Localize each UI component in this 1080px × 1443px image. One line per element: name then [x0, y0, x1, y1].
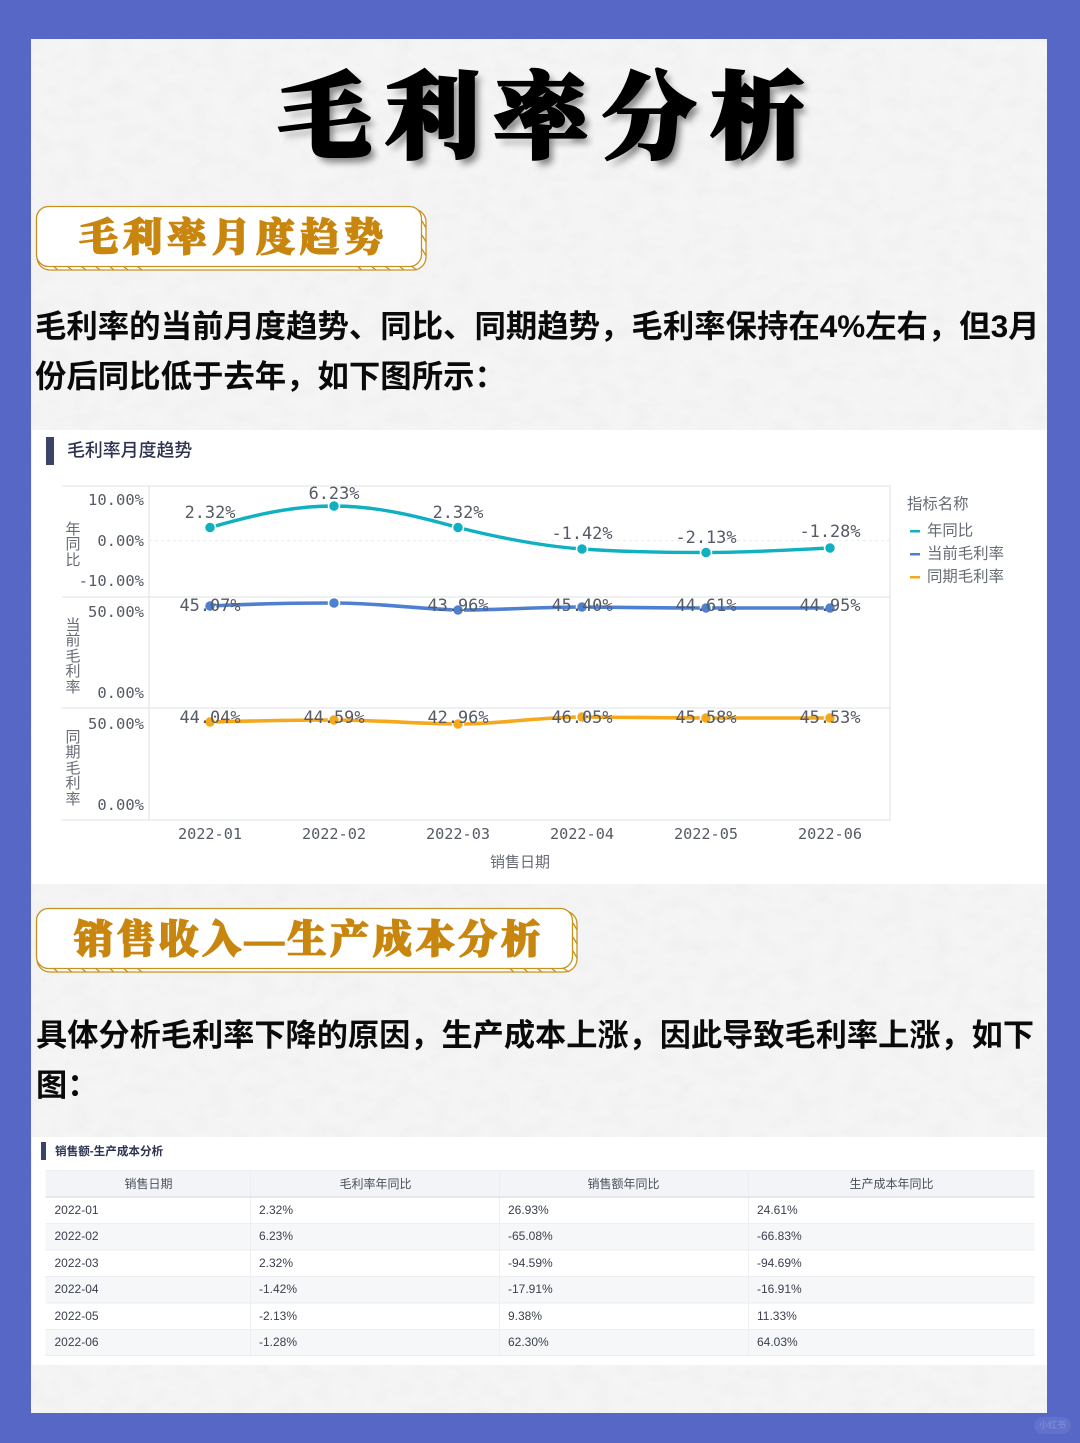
- table header: 销售日期: [124, 1177, 172, 1191]
- table grid: [46, 1170, 1034, 1356]
- series: current margin: 43.96%: [427, 595, 489, 615]
- legend: 当前毛利率: [927, 544, 1004, 562]
- x axis labels: [178, 825, 862, 843]
- y axis ticks: [79, 491, 145, 814]
- series: year over year: [185, 483, 861, 558]
- panel: line chart: [32, 430, 1047, 884]
- table rows: 2022-05: [54, 1309, 99, 1323]
- table rows: -65.08%: [508, 1229, 553, 1243]
- table rows: 2.32%: [259, 1203, 293, 1217]
- y axis ticks: 0.00%: [97, 684, 145, 702]
- table header: 生产成本年同比: [849, 1177, 934, 1191]
- paragraph: trend description: 毛利率的当前月度趋势、同比、同期趋势，毛利率保持在4%左右，但3月: [35, 309, 1040, 344]
- series: year over year: -1.42%: [551, 523, 613, 543]
- paragraph: cause description: 图：: [36, 1068, 98, 1103]
- table header: 毛利率年同比: [339, 1177, 412, 1191]
- badge: revenue and cost: [36, 908, 578, 973]
- legend: 年同比: [927, 522, 973, 540]
- series: current margin: 45.40%: [551, 595, 613, 615]
- series: current margin: [179, 595, 861, 616]
- series: prior period margin: 44.04%: [179, 707, 241, 727]
- y axis titles: 比: [65, 552, 81, 569]
- badge: monthly trend: [36, 206, 427, 271]
- watermark: 小红书: [1039, 1420, 1066, 1430]
- paragraph: trend description: 份后同比低于去年，如下图所示：: [35, 359, 506, 394]
- y axis titles: 毛: [65, 648, 81, 665]
- y axis ticks: -10.00%: [79, 572, 145, 590]
- y axis titles: 同: [65, 536, 81, 553]
- table rows: 2.32%: [259, 1256, 293, 1270]
- series: year over year: -1.28%: [799, 521, 861, 541]
- y axis ticks: 10.00%: [88, 491, 145, 509]
- x axis labels: 2022-03: [426, 825, 490, 843]
- y axis ticks: 50.00%: [88, 603, 145, 621]
- table header: [124, 1177, 934, 1191]
- table rows: 62.30%: [508, 1335, 549, 1349]
- series: prior period margin: 42.96%: [427, 707, 489, 727]
- x axis title: 销售日期: [490, 854, 550, 871]
- y axis titles: 毛: [65, 760, 81, 777]
- table rows: 6.23%: [259, 1229, 293, 1243]
- x axis labels: 2022-05: [674, 825, 738, 843]
- series: year over year: -2.13%: [675, 527, 737, 547]
- legend: 同期毛利率: [927, 568, 1004, 586]
- table rows: 2022-06: [54, 1335, 99, 1349]
- table rows: -1.42%: [259, 1282, 297, 1296]
- series: current margin: 44.95%: [799, 595, 861, 615]
- table heading: [41, 1142, 163, 1160]
- watermark: [1034, 1417, 1071, 1434]
- y axis titles: 年: [65, 521, 81, 538]
- table rows: -94.59%: [508, 1256, 553, 1270]
- table header: 销售额年同比: [587, 1177, 660, 1191]
- table rows: [54, 1203, 802, 1349]
- series: current margin: 45.07%: [179, 595, 241, 615]
- table rows: -17.91%: [508, 1282, 553, 1296]
- series: year over year: 2.32%: [433, 502, 483, 522]
- y axis titles: 前: [65, 632, 81, 649]
- badge text: 毛利率月度趋势: [79, 217, 388, 260]
- paragraph: trend description: [35, 309, 1040, 394]
- table rows: 26.93%: [508, 1203, 549, 1217]
- table rows: 2022-04: [54, 1282, 99, 1296]
- table rows: 24.61%: [757, 1203, 798, 1217]
- series: year over year: 6.23%: [309, 483, 359, 503]
- table rows: 2022-03: [54, 1256, 99, 1270]
- y axis titles: 同: [65, 729, 81, 746]
- table rows: 11.33%: [757, 1309, 797, 1323]
- x axis labels: 2022-02: [302, 825, 366, 843]
- table rows: 9.38%: [508, 1309, 542, 1323]
- x axis labels: 2022-01: [178, 825, 242, 843]
- table rows: 2022-01: [54, 1203, 99, 1217]
- series: prior period margin: 45.53%: [799, 707, 861, 727]
- badge text: 销售收入—生产成本分析: [74, 919, 544, 962]
- legend: 指标名称: [907, 495, 969, 513]
- y axis ticks: 0.00%: [97, 532, 145, 550]
- table rows: -66.83%: [757, 1229, 802, 1243]
- series: prior period margin: 44.59%: [303, 707, 365, 727]
- table rows: 64.03%: [757, 1335, 798, 1349]
- table rows: -94.69%: [757, 1256, 802, 1270]
- panel: data table: [32, 1137, 1047, 1365]
- y axis titles: 当: [65, 617, 81, 634]
- legend: [907, 495, 1004, 586]
- chart heading: [46, 437, 192, 465]
- series: prior period margin: [179, 707, 861, 730]
- table rows: -1.28%: [259, 1335, 297, 1349]
- series: current margin: 44.61%: [675, 595, 737, 615]
- chart grid: [62, 486, 890, 820]
- paragraph: cause description: [36, 1018, 1034, 1103]
- table rows: -2.13%: [259, 1309, 297, 1323]
- paragraph: cause description: 具体分析毛利率下降的原因，生产成本上涨，因此导致毛利率上涨，如下: [36, 1018, 1034, 1053]
- y axis titles: [65, 521, 81, 808]
- x axis labels: 2022-06: [798, 825, 862, 843]
- table rows: 2022-02: [54, 1229, 99, 1243]
- title: 毛利率分析: [277, 67, 818, 171]
- y axis titles: 利: [65, 663, 81, 680]
- x axis labels: 2022-04: [550, 825, 614, 843]
- y axis ticks: 0.00%: [97, 796, 145, 814]
- y axis titles: 率: [65, 679, 81, 696]
- y axis titles: 率: [65, 791, 81, 808]
- y axis titles: 期: [65, 744, 81, 761]
- y axis titles: 利: [65, 775, 81, 792]
- table heading: 销售额-生产成本分析: [55, 1145, 163, 1158]
- y axis ticks: 50.00%: [88, 715, 145, 733]
- chart heading: 毛利率月度趋势: [67, 440, 192, 460]
- series: year over year: 2.32%: [185, 502, 235, 522]
- series: prior period margin: 46.05%: [551, 707, 613, 727]
- table rows: -16.91%: [757, 1282, 802, 1296]
- series: prior period margin: 45.58%: [675, 707, 737, 727]
